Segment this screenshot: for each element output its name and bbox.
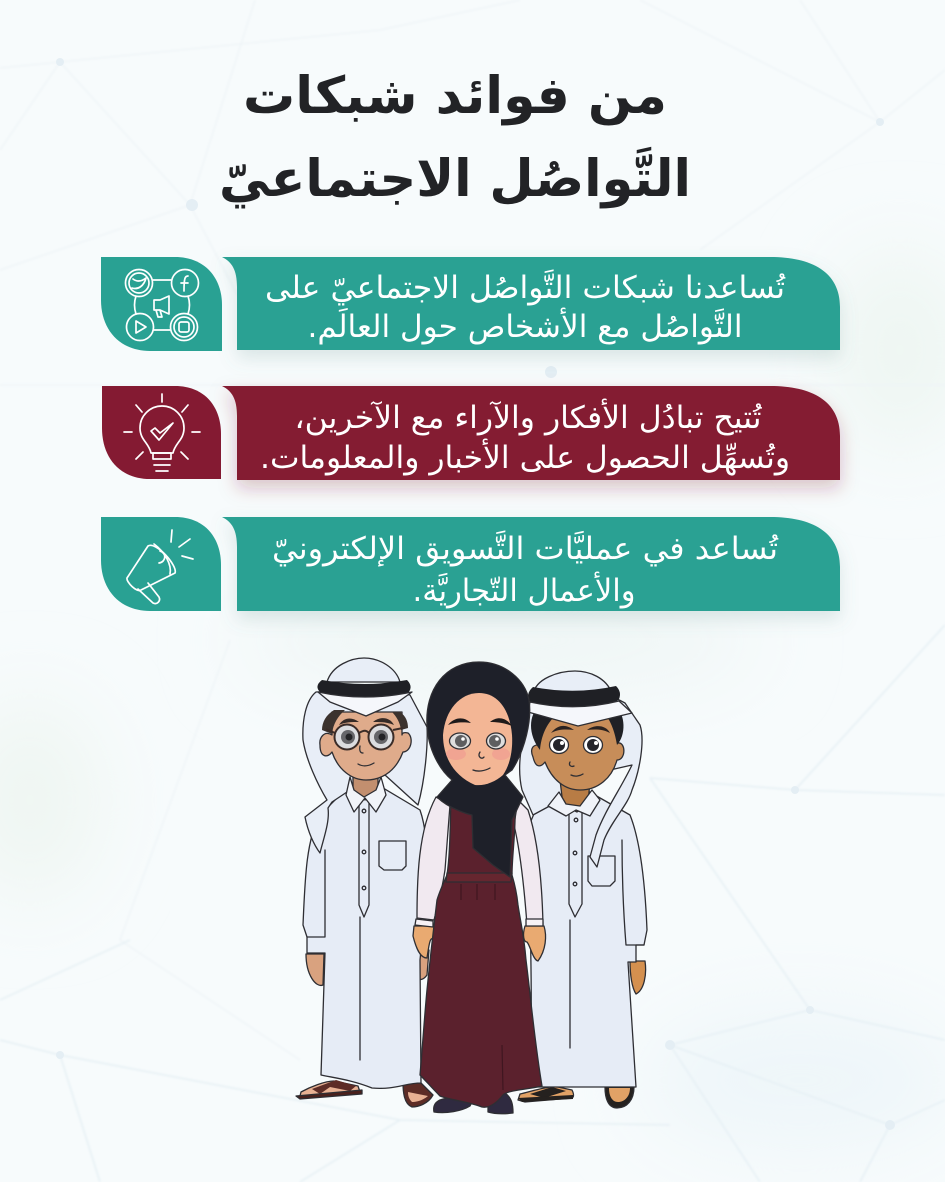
panel: e-marketing — [101, 517, 840, 611]
ghutra — [303, 690, 427, 853]
text bar: تُساعد في عمليَّات التَّسويق الإلكترونيّ — [272, 529, 779, 567]
sandals — [518, 1087, 574, 1102]
shoes — [434, 1098, 472, 1113]
character: boy on the right — [518, 671, 647, 1108]
hands — [413, 926, 436, 958]
icon tile: light bulb — [102, 386, 221, 479]
headcover and agal — [327, 658, 400, 682]
text bar: تُتيح تبادُل الأفكار والآراء مع الآخرين، — [294, 398, 763, 436]
text bar: التَّواصُل مع الأشخاص حول العالَم. — [308, 307, 742, 345]
hand — [630, 961, 646, 994]
dress — [420, 800, 542, 1107]
face — [443, 693, 512, 785]
sandals — [300, 1081, 360, 1096]
icon tile: social media — [101, 257, 222, 351]
text bar: والأعمال التّجاريَّة. — [412, 571, 636, 609]
ghutra — [520, 690, 642, 867]
neck and collar — [353, 772, 378, 800]
hijab — [427, 662, 530, 877]
sleeves — [417, 797, 450, 920]
title: التَّواصُل الاجتماعيّ — [219, 146, 691, 209]
face — [532, 715, 624, 790]
thobe — [527, 790, 647, 1087]
panel: connect with people — [101, 257, 840, 351]
character: girl in the centre — [413, 662, 546, 1114]
panel: exchange ideas — [102, 386, 840, 480]
title — [219, 67, 691, 209]
thobe — [303, 785, 428, 1088]
illustration: three students — [296, 658, 647, 1114]
face — [320, 712, 411, 780]
glasses — [326, 724, 403, 750]
character: boy with glasses on the left — [296, 658, 433, 1107]
neck — [560, 780, 590, 812]
title: من فوائد شبكات — [243, 67, 667, 126]
headcover and agal — [533, 671, 612, 695]
text bar: تُساعدنا شبكات التَّواصُل الاجتماعيّ على — [265, 268, 786, 306]
icon tile: megaphone — [101, 517, 221, 611]
text bar — [222, 257, 840, 350]
text bar — [222, 517, 840, 611]
text bar: وتُسهِّل الحصول على الأخبار والمعلومات. — [260, 438, 790, 476]
text bar — [222, 386, 840, 480]
hands — [306, 954, 324, 985]
